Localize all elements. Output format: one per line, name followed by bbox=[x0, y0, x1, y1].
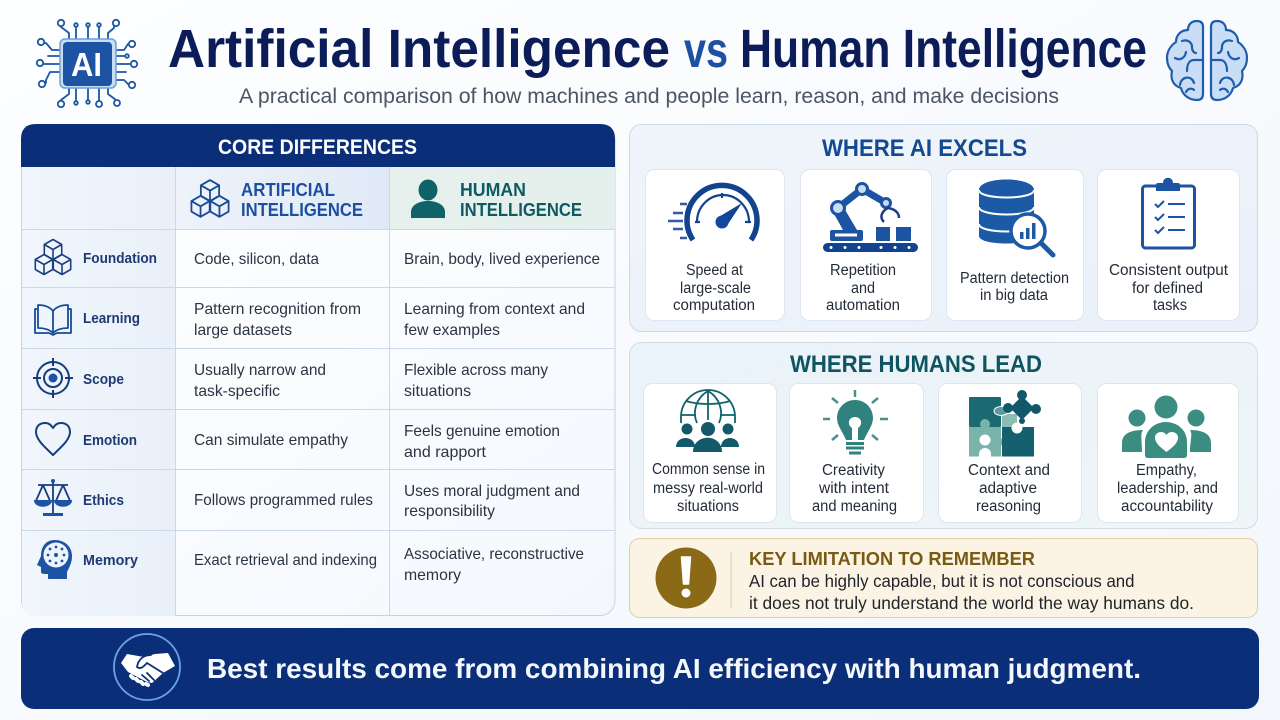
card: pattern detection: Pattern detection bbox=[960, 270, 1069, 287]
card: context: adaptive bbox=[979, 480, 1037, 497]
card: context: reasoning bbox=[976, 498, 1041, 515]
row: foundation: Code, silicon, data bbox=[194, 251, 319, 268]
callout: key limitation: AI can be highly capable, but it is not conscious and bbox=[749, 571, 1134, 591]
callout: key limitation: KEY LIMITATION TO REMEMBER bbox=[749, 548, 1035, 569]
card: pattern detection: in big data bbox=[980, 287, 1048, 304]
card: creativity bbox=[790, 384, 924, 522]
card: empathy: accountability bbox=[1121, 498, 1213, 515]
row: emotion bbox=[36, 423, 560, 461]
logo: AI chip: AI bbox=[71, 46, 102, 83]
banner: takeaway: Best results come from combining AI efficiency with human judgment. bbox=[207, 653, 1141, 684]
row: ethics: Ethics bbox=[83, 492, 124, 509]
icon: warning bbox=[656, 548, 716, 608]
row: learning: Learning bbox=[83, 310, 140, 327]
column heading: artificial intelligence: INTELLIGENCE bbox=[241, 199, 363, 220]
card: speed: computation bbox=[673, 297, 755, 314]
card: repetition: and bbox=[851, 280, 875, 297]
row: ethics bbox=[34, 479, 580, 520]
row: emotion: Emotion bbox=[83, 432, 137, 449]
row: learning: Learning from context and bbox=[404, 301, 585, 318]
row: learning: large datasets bbox=[194, 322, 292, 339]
card: empathy: Empathy, bbox=[1136, 462, 1197, 479]
row: ethics: Uses moral judgment and bbox=[404, 483, 580, 500]
card: consistent output bbox=[1098, 170, 1240, 320]
card: creativity: and meaning bbox=[812, 498, 897, 515]
row: emotion: Feels genuine emotion bbox=[404, 423, 560, 440]
card: context: Context and bbox=[968, 462, 1050, 479]
row: memory bbox=[37, 540, 584, 584]
header cell: human intelligence background bbox=[390, 167, 615, 229]
panel header: CORE DIFFERENCES bbox=[218, 136, 417, 159]
subtitle: A practical comparison of how machines and people learn, reason, and make decisions bbox=[239, 84, 1059, 108]
card: speed: large-scale bbox=[680, 280, 751, 297]
card: repetition bbox=[800, 170, 932, 320]
column heading: human intelligence bbox=[460, 179, 582, 220]
row: emotion: and rapport bbox=[404, 444, 487, 461]
panel header bbox=[21, 124, 615, 167]
icon: handshake bbox=[114, 634, 180, 700]
row: foundation bbox=[35, 240, 600, 274]
card: empathy bbox=[1098, 384, 1238, 522]
heading: where AI excels: WHERE AI EXCELS bbox=[822, 135, 1027, 162]
heading: where humans lead: WHERE HUMANS LEAD bbox=[790, 351, 1042, 378]
card: pattern detection bbox=[946, 170, 1084, 320]
card: empathy: leadership, and bbox=[1117, 480, 1218, 497]
row: scope: Usually narrow and bbox=[194, 362, 326, 379]
card: creativity: with intent bbox=[818, 480, 890, 497]
row: foundation: Foundation bbox=[83, 250, 157, 267]
row: scope: Flexible across many bbox=[404, 362, 548, 379]
row: foundation: Brain, body, lived experience bbox=[404, 251, 600, 268]
panel: where humans lead bbox=[630, 342, 1258, 528]
column heading: human intelligence: INTELLIGENCE bbox=[460, 199, 582, 220]
callout: key limitation bbox=[630, 538, 1258, 618]
card: context bbox=[938, 384, 1082, 522]
title: vs bbox=[684, 22, 728, 78]
card: consistent output: for defined bbox=[1132, 280, 1203, 297]
icon: AI cubes bbox=[191, 180, 229, 217]
column heading: artificial intelligence: ARTIFICIAL bbox=[241, 179, 335, 200]
row: scope bbox=[33, 358, 548, 400]
card: speed bbox=[646, 170, 784, 320]
row: ethics: Follows programmed rules bbox=[194, 492, 373, 509]
panel: core differences bbox=[21, 124, 615, 616]
card: repetition: Repetition bbox=[830, 262, 896, 279]
icon: human bust bbox=[411, 180, 445, 218]
icon: brain bbox=[1167, 21, 1247, 100]
title: Human Intelligence bbox=[740, 19, 1147, 79]
row: memory: Associative, reconstructive bbox=[404, 546, 584, 563]
header cell: artificial intelligence background bbox=[175, 167, 390, 229]
card: common sense: situations bbox=[677, 498, 739, 515]
row: memory: Memory bbox=[83, 552, 139, 569]
row: learning: Pattern recognition from bbox=[194, 301, 361, 318]
row: learning: few examples bbox=[404, 322, 500, 339]
card: speed: Speed at bbox=[686, 262, 744, 279]
row: scope: task-specific bbox=[194, 383, 280, 400]
title bbox=[168, 19, 1147, 79]
callout: key limitation: it does not truly understand the world the way humans do. bbox=[749, 593, 1194, 613]
card: common sense: messy real-world bbox=[653, 480, 763, 497]
row: memory: Exact retrieval and indexing bbox=[194, 552, 377, 569]
row: scope: Scope bbox=[83, 371, 124, 388]
card: creativity: Creativity bbox=[822, 462, 885, 479]
row: ethics: responsibility bbox=[404, 503, 495, 520]
row: emotion: Can simulate empathy bbox=[194, 432, 348, 449]
card: common sense: Common sense in bbox=[652, 461, 765, 478]
panel: where AI excels bbox=[630, 124, 1258, 332]
row: scope: situations bbox=[404, 383, 471, 400]
column heading: human intelligence: HUMAN bbox=[460, 179, 526, 200]
card: consistent output: tasks bbox=[1153, 297, 1187, 314]
card: repetition: automation bbox=[826, 297, 900, 314]
logo: AI chip bbox=[37, 20, 137, 107]
column: row labels background bbox=[22, 167, 175, 616]
card: consistent output: Consistent output bbox=[1109, 262, 1229, 279]
title: Artificial Intelligence bbox=[168, 19, 670, 79]
row: learning bbox=[35, 301, 585, 339]
banner: takeaway bbox=[21, 628, 1259, 709]
column heading: artificial intelligence bbox=[241, 179, 363, 220]
row: memory: memory bbox=[404, 567, 461, 584]
card: common sense bbox=[644, 384, 776, 522]
